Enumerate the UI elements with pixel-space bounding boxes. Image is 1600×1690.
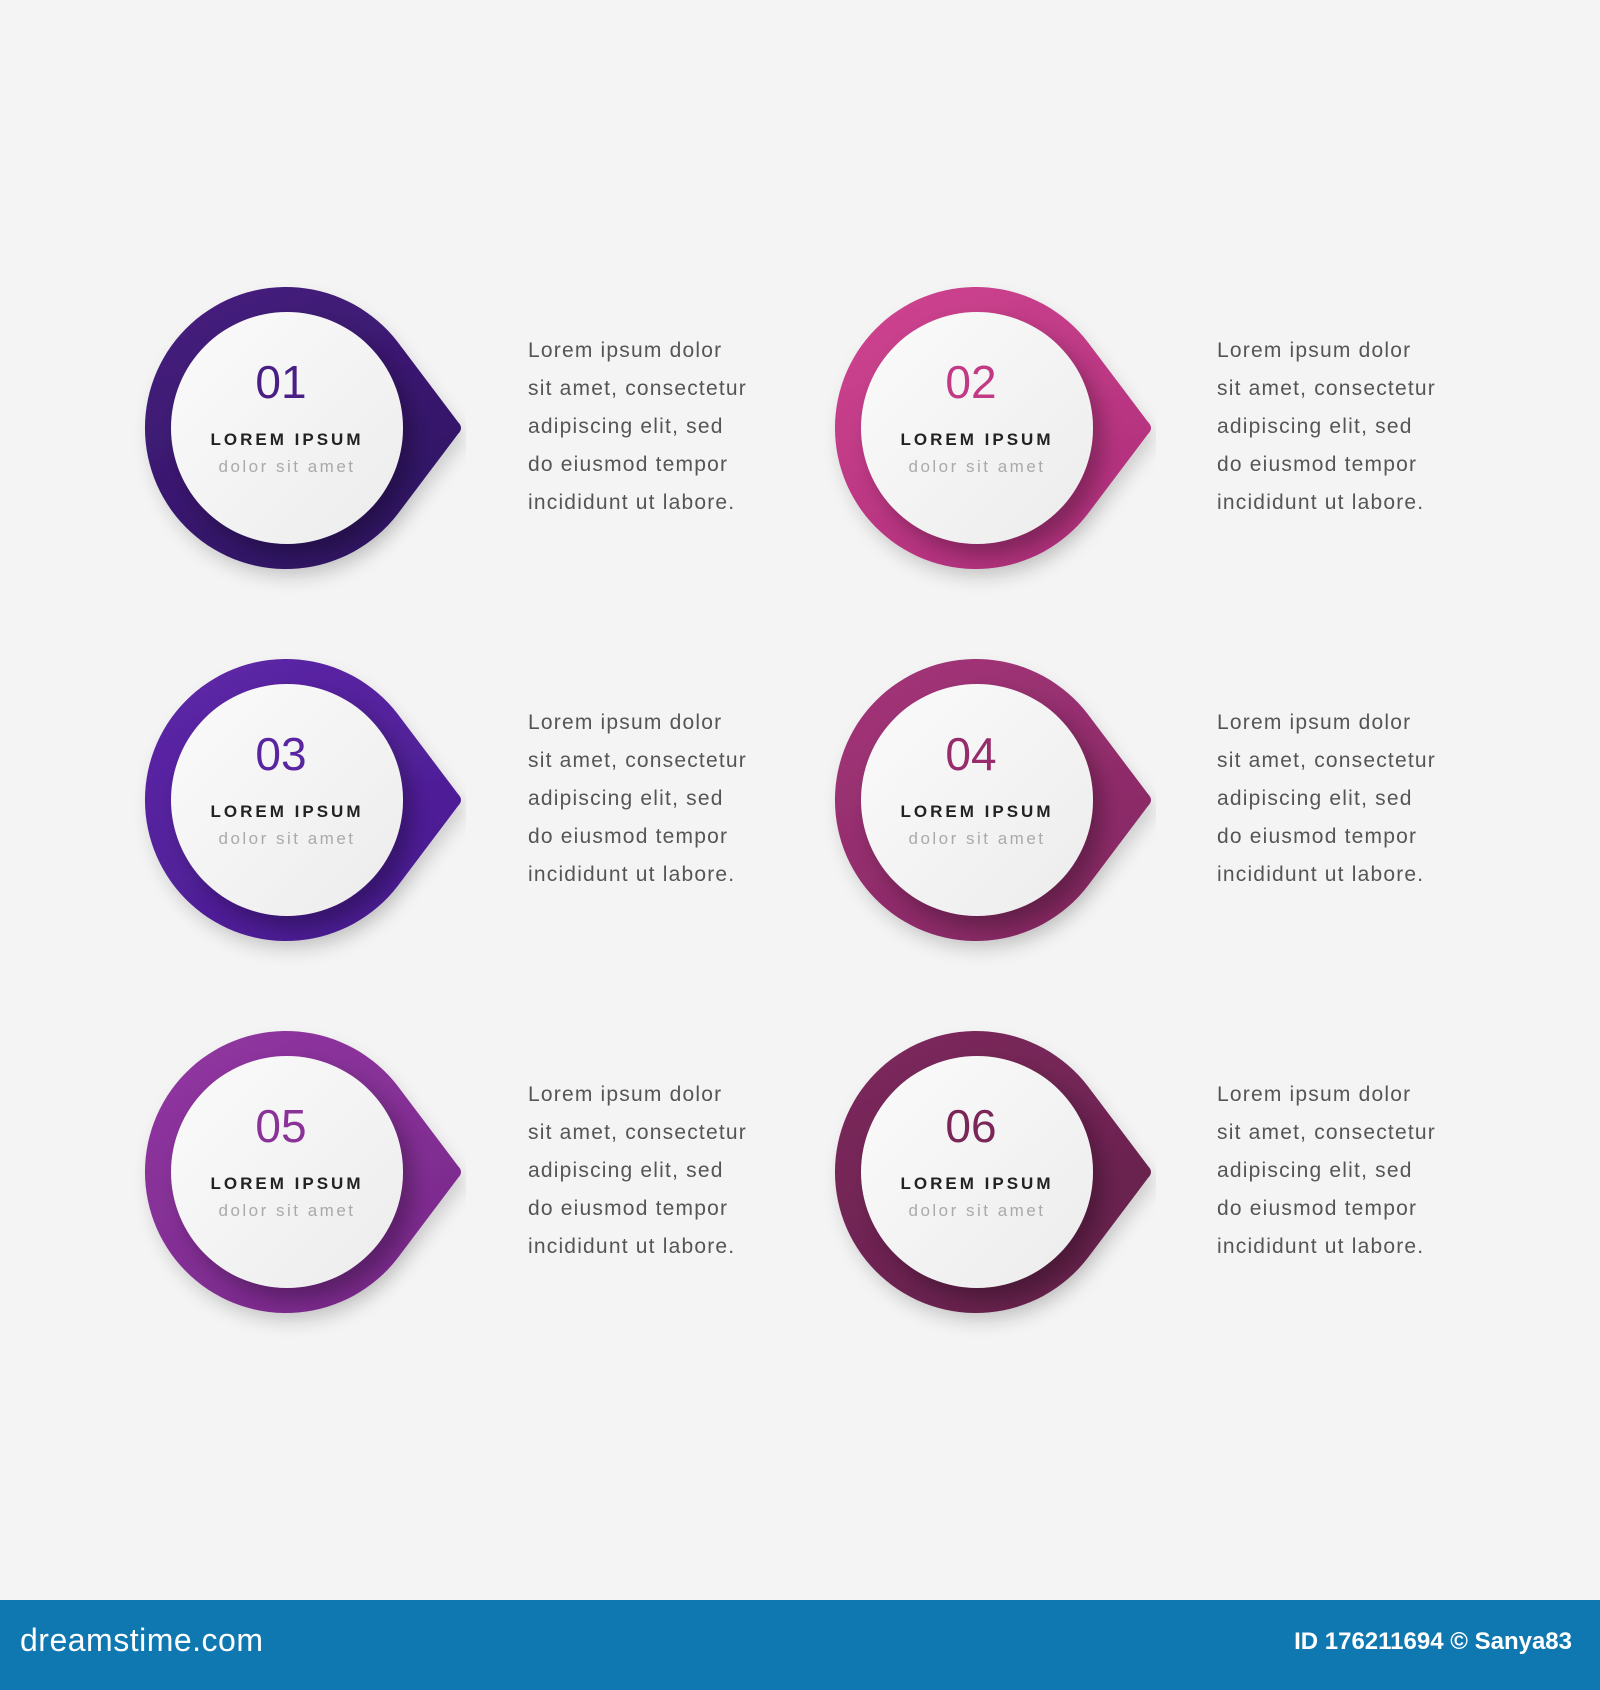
text 01: adipiscing elit, sed — [528, 415, 724, 438]
badge 06: 06 — [945, 1100, 997, 1152]
text 03: sit amet, consectetur — [528, 749, 747, 772]
text 03 — [528, 711, 747, 886]
text 01: Lorem ipsum dolor — [528, 339, 722, 362]
badge 06: LOREM IPSUM — [901, 1174, 1053, 1193]
image id: ID 176211694 © Sanya83 — [1294, 1628, 1572, 1655]
text 06 — [1217, 1083, 1436, 1258]
text 04: sit amet, consectetur — [1217, 749, 1436, 772]
text 04: Lorem ipsum dolor — [1217, 711, 1411, 734]
text 05: sit amet, consectetur — [528, 1121, 747, 1144]
text 05 — [528, 1083, 747, 1258]
text 06: Lorem ipsum dolor — [1217, 1083, 1411, 1106]
text 04 — [1217, 711, 1436, 886]
text 02: sit amet, consectetur — [1217, 377, 1436, 400]
badge 01: dolor sit amet — [218, 457, 356, 476]
badge 04 — [833, 659, 1156, 957]
badge 05: LOREM IPSUM — [211, 1174, 363, 1193]
badge 05: 05 — [255, 1100, 307, 1152]
text 03: incididunt ut labore. — [528, 863, 735, 886]
text 06: incididunt ut labore. — [1217, 1235, 1424, 1258]
text 01: do eiusmod tempor — [528, 453, 728, 476]
text 06: do eiusmod tempor — [1217, 1197, 1417, 1220]
badge 02 — [833, 287, 1156, 585]
text 05: Lorem ipsum dolor — [528, 1083, 722, 1106]
text 04: adipiscing elit, sed — [1217, 787, 1413, 810]
badge 03: dolor sit amet — [218, 829, 356, 848]
logo text: dreamstime.com — [20, 1622, 264, 1658]
text 03: Lorem ipsum dolor — [528, 711, 722, 734]
badge 02: dolor sit amet — [908, 457, 1046, 476]
text 01 — [528, 339, 747, 514]
badge 02: LOREM IPSUM — [901, 430, 1053, 449]
text 02: incididunt ut labore. — [1217, 491, 1424, 514]
text 03: adipiscing elit, sed — [528, 787, 724, 810]
badge 03: LOREM IPSUM — [211, 802, 363, 821]
badge 04: dolor sit amet — [908, 829, 1046, 848]
text 05: do eiusmod tempor — [528, 1197, 728, 1220]
badge 05: dolor sit amet — [218, 1201, 356, 1220]
badge 03: 03 — [255, 728, 307, 780]
badge 02: 02 — [945, 356, 997, 408]
text 01: sit amet, consectetur — [528, 377, 747, 400]
badge 04: 04 — [945, 728, 997, 780]
text 06: sit amet, consectetur — [1217, 1121, 1436, 1144]
badge 06: dolor sit amet — [908, 1201, 1046, 1220]
badge 03 — [143, 659, 466, 957]
badge 01: 01 — [255, 356, 307, 408]
text 02: adipiscing elit, sed — [1217, 415, 1413, 438]
badge 01: LOREM IPSUM — [211, 430, 363, 449]
text 01: incididunt ut labore. — [528, 491, 735, 514]
text 02: Lorem ipsum dolor — [1217, 339, 1411, 362]
badge 05 — [143, 1031, 466, 1329]
badge 01 — [143, 287, 466, 585]
text 03: do eiusmod tempor — [528, 825, 728, 848]
text 04: do eiusmod tempor — [1217, 825, 1417, 848]
footer banner — [0, 1600, 1600, 1690]
text 04: incididunt ut labore. — [1217, 863, 1424, 886]
text 02: do eiusmod tempor — [1217, 453, 1417, 476]
text 05: incididunt ut labore. — [528, 1235, 735, 1258]
badge 06 — [833, 1031, 1156, 1329]
badge 04: LOREM IPSUM — [901, 802, 1053, 821]
text 06: adipiscing elit, sed — [1217, 1159, 1413, 1182]
text 05: adipiscing elit, sed — [528, 1159, 724, 1182]
text 02 — [1217, 339, 1436, 514]
